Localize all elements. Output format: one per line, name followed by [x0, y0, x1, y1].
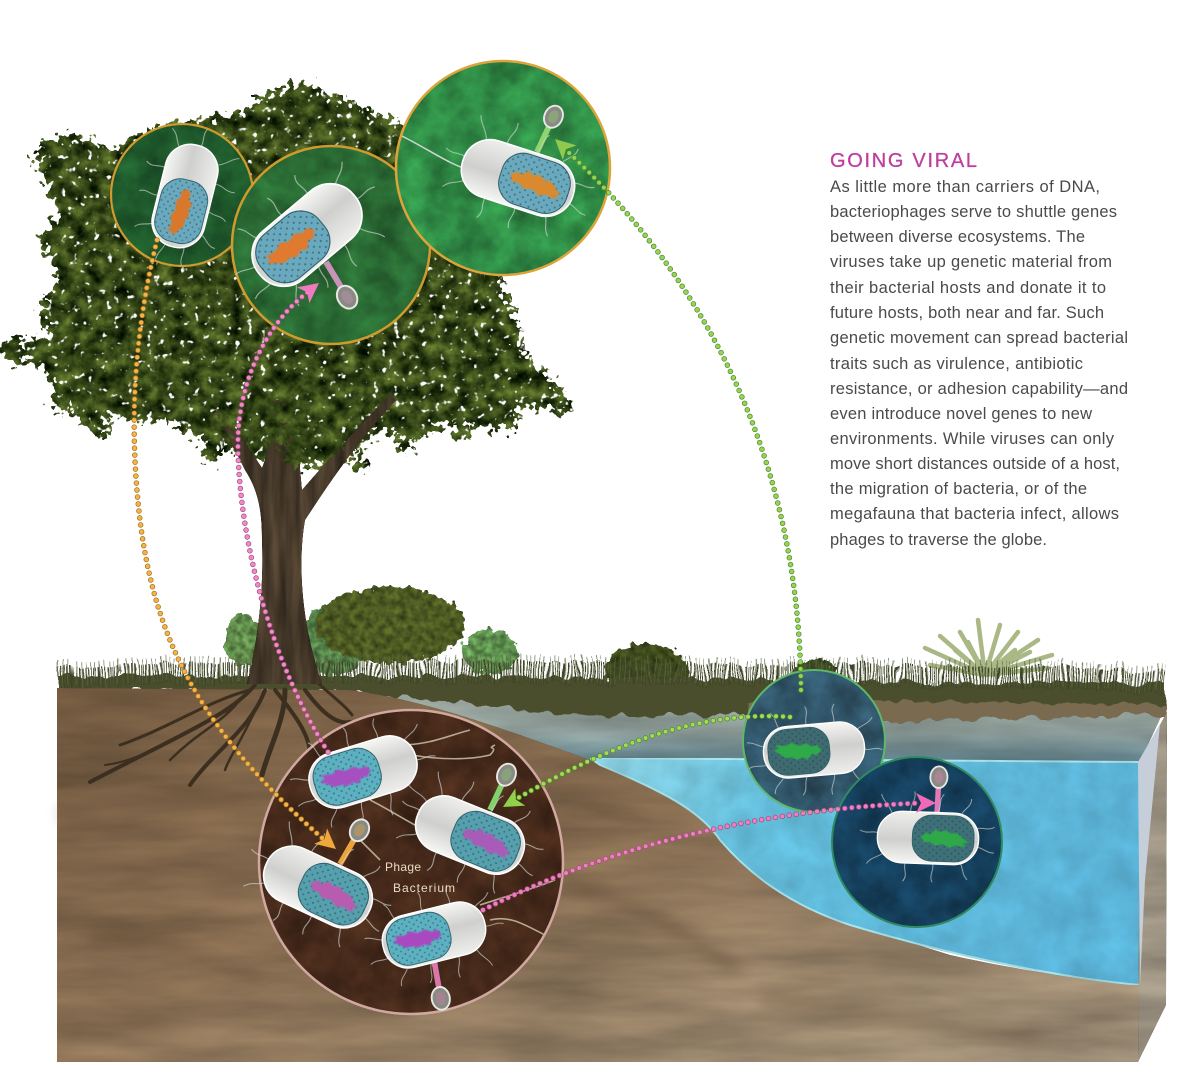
- arrow: green dotted to leaf: [548, 132, 801, 690]
- soil block: [57, 688, 1140, 1062]
- shoreline gravel: [350, 685, 1165, 762]
- soil dark bands: [60, 804, 1040, 1035]
- bacterium: green genes with pink phage: [858, 766, 996, 884]
- label: bacterium: Bacterium: [393, 881, 455, 895]
- tree trunk: [215, 395, 396, 684]
- text block: description: phages to traverse the globe.: [830, 531, 1047, 549]
- bacterium: green genes: [744, 700, 886, 802]
- bacterium: orange genes: [124, 117, 248, 274]
- panel: small leaf circle: [111, 117, 253, 274]
- text block: description: future hosts, both near and far. Such: [830, 304, 1104, 322]
- panel: upper water circle: [743, 670, 886, 812]
- tree canopy: [0, 82, 570, 471]
- block side face: [1138, 712, 1167, 1062]
- water: [590, 758, 1142, 985]
- text block: description: As little more than carriers of DNA,: [830, 178, 1100, 196]
- label: phage: Phage: [385, 860, 421, 874]
- grass band: [60, 668, 1165, 722]
- arrow: pink dotted to water: [483, 793, 936, 910]
- panel: middle leaf circle: [211, 141, 430, 344]
- roots: [90, 680, 352, 785]
- text block: description: move short distances outside of a host,: [830, 455, 1120, 473]
- text block: description: even introduce novel genes to new: [830, 405, 1092, 423]
- text block: description: megafauna that bacteria infect, allows: [830, 505, 1119, 523]
- text block: description: their bacterial hosts and donate it to: [830, 279, 1106, 297]
- arrow: orange dotted: [134, 240, 342, 857]
- text block: description: the migration of bacteria, or of the: [830, 480, 1087, 498]
- text block: description: environments. While viruses can only: [830, 430, 1115, 448]
- bacterium: orange genes with green phage: [402, 104, 594, 236]
- agave plant: [925, 620, 1052, 675]
- text block: description: traits such as virulence, antibiotic: [830, 355, 1083, 373]
- text block: description: viruses take up genetic material from: [830, 253, 1112, 271]
- bacterium 4 with pink phage: [357, 874, 514, 1011]
- heading: GOING VIRAL: [830, 150, 977, 172]
- bushes: [225, 587, 837, 696]
- panel: lower water circle: [832, 757, 1002, 927]
- arrow: green dotted to soil: [498, 716, 790, 816]
- text block: description: genetic movement can spread bacterial: [830, 329, 1128, 347]
- bacterium 2 with green phage: [382, 759, 557, 908]
- panel: soil circle: [228, 704, 563, 1014]
- bacterium 3 with orange phage: [228, 808, 407, 963]
- foliage in front of upper trunk: [212, 367, 352, 464]
- bacterium 1: [280, 704, 448, 841]
- arrow: pink dotted to tree: [238, 275, 328, 752]
- panel: large leaf circle: [396, 61, 610, 275]
- text block: description: bacteriophages serve to shuttle genes: [830, 203, 1117, 221]
- bacterium: orange genes with phage: [211, 141, 406, 330]
- text block: description: between diverse ecosystems. The: [830, 228, 1085, 246]
- root-like bacterial hairs: [360, 730, 555, 935]
- text block: description: [830, 178, 1128, 549]
- text block: description: resistance, or adhesion capability—and: [830, 380, 1128, 398]
